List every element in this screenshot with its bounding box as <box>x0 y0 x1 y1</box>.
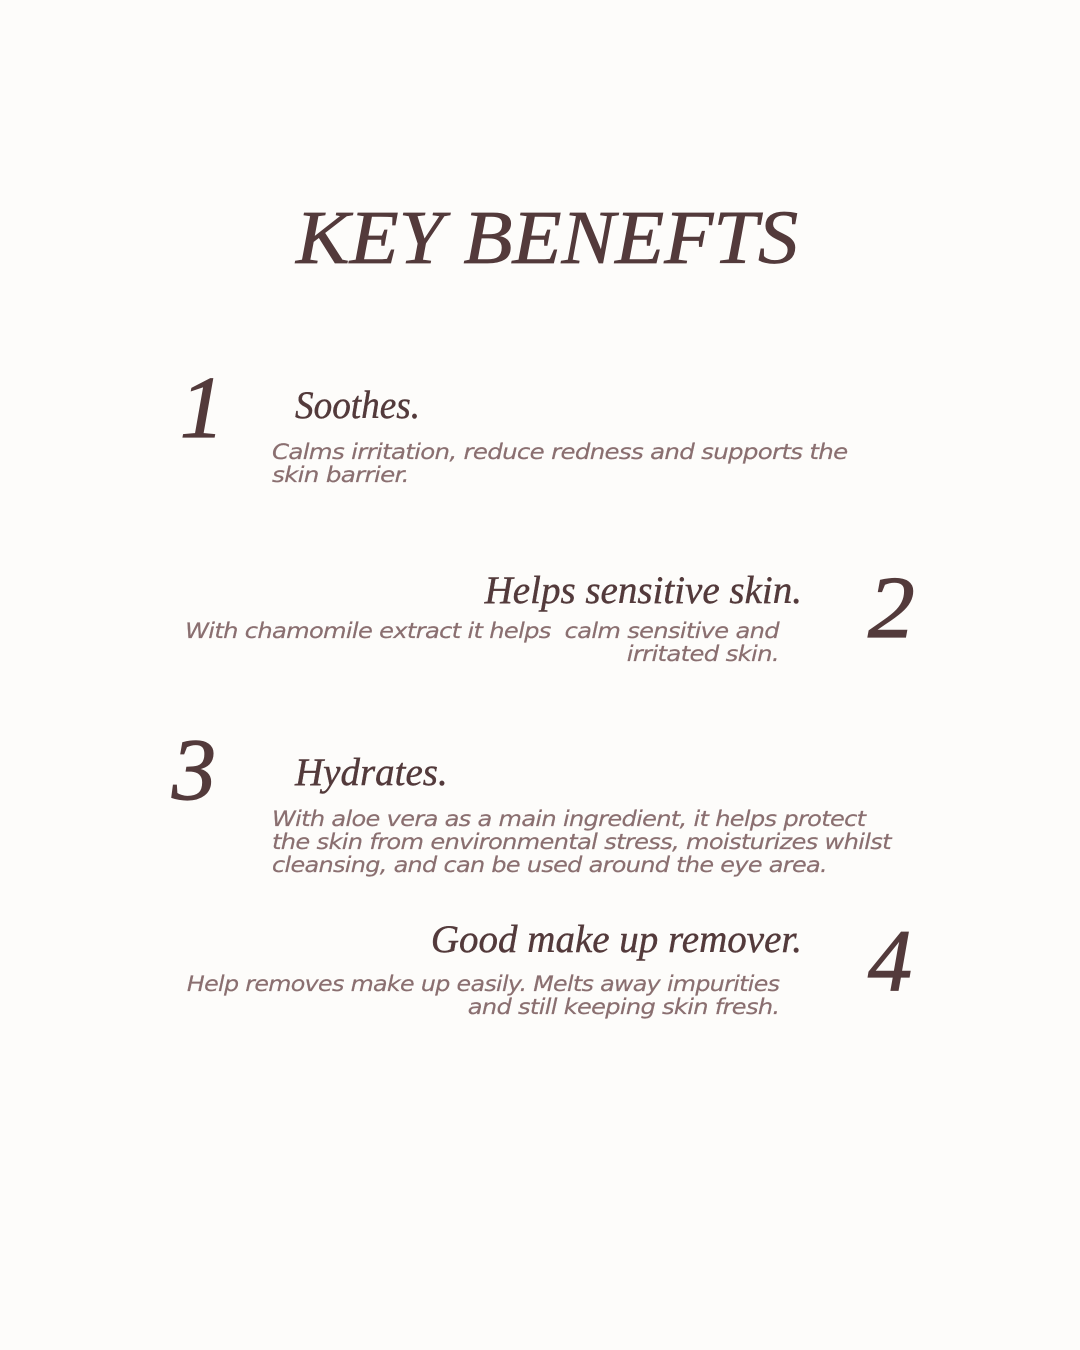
description: hydrates: With aloe vera as a main ingredient, it helps protect <box>272 807 865 831</box>
description: helps sensitive skin <box>185 619 780 666</box>
benefit 2 <box>185 560 915 666</box>
description: helps sensitive skin: irritated skin. <box>627 642 779 666</box>
description: helps sensitive skin: With chamomile extract it helps calm sensitive and <box>185 619 779 643</box>
description: good make up remover: and still keeping skin fresh. <box>467 995 779 1019</box>
heading: good make up remover: Good make up remover. <box>431 918 802 961</box>
title: KEY BENEFTS <box>296 196 798 280</box>
description: soothes: skin barrier. <box>272 463 409 487</box>
number 2: 2 <box>868 560 915 657</box>
heading: soothes: Soothes. <box>295 384 420 427</box>
description: hydrates <box>272 807 892 877</box>
heading: hydrates: Hydrates. <box>295 751 448 794</box>
benefit 1 <box>180 360 848 487</box>
number 3: 3 <box>172 722 216 819</box>
heading: helps sensitive skin: Helps sensitive skin. <box>485 569 802 612</box>
description: hydrates: cleansing, and can be used around the eye area. <box>272 853 827 877</box>
number 1: 1 <box>180 360 224 457</box>
description: good make up remover <box>187 972 780 1019</box>
description: good make up remover: Help removes make up easily. Melts away impurities <box>187 972 779 996</box>
description: hydrates: the skin from environmental stress, moisturizes whilst <box>272 830 891 854</box>
number 4: 4 <box>868 913 912 1010</box>
description: soothes: Calms irritation, reduce redness and supports the <box>272 440 847 464</box>
benefit 3 <box>171 722 892 877</box>
description: soothes <box>272 440 848 487</box>
benefit 4 <box>187 913 912 1019</box>
